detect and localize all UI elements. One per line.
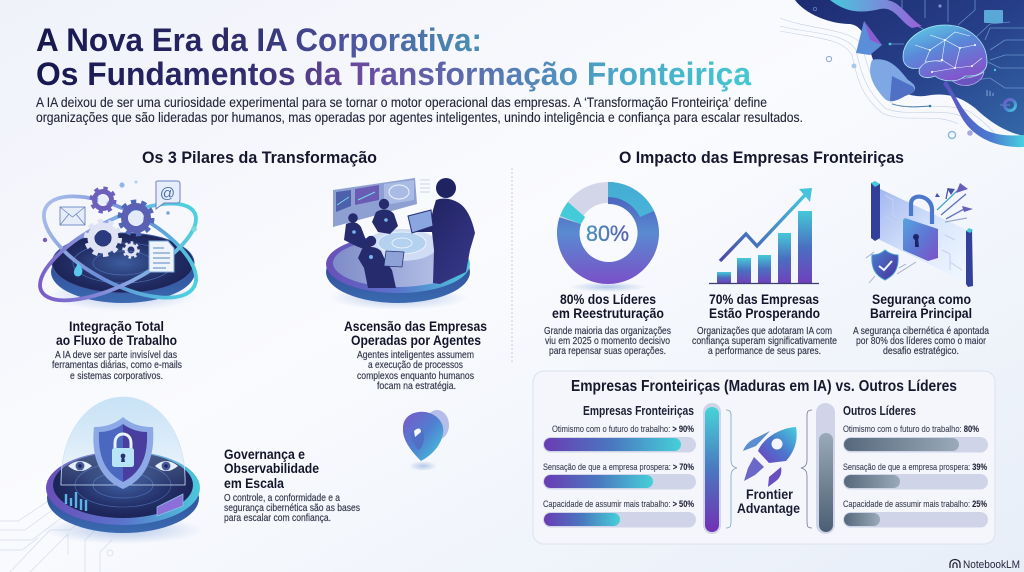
- arrows: [935, 183, 973, 222]
- heading: Observabilidade: [224, 461, 319, 476]
- heading: [344, 319, 487, 348]
- tablet: [408, 210, 433, 233]
- shield check: [872, 250, 898, 280]
- description: A segurança cibernética é apontada: [853, 326, 989, 337]
- panel: stat security: [853, 181, 989, 357]
- droplet: [74, 262, 82, 276]
- contour lines: [780, 18, 1000, 142]
- title: A Nova Era da IA Corporativa:: [36, 22, 482, 58]
- panel: pillar 3: [43, 397, 360, 544]
- gear right: [120, 202, 152, 234]
- bar: optimism 90: Otimismo com o futuro do trabalho: > 90%: [552, 424, 694, 434]
- Frontier Advantage label: Frontier: [746, 487, 794, 502]
- panel: pillar 2: [326, 178, 487, 392]
- heading: ao Fluxo de Trabalho: [56, 333, 177, 348]
- description: focam na estratégia.: [377, 381, 456, 392]
- mini chart: [157, 494, 183, 516]
- Frontier Advantage label: Advantage: [737, 501, 800, 516]
- donut chart: 80%: [586, 221, 629, 246]
- description: complexos enquanto humanos: [357, 371, 474, 382]
- orbit back: [29, 176, 211, 318]
- description: por 80% dos líderes como o maior: [856, 336, 987, 347]
- heading: [709, 292, 820, 321]
- mini bars: [66, 492, 86, 511]
- brain nodes: [929, 39, 976, 73]
- intro paragraph: [36, 95, 803, 125]
- subheading: Outros Líderes: [843, 404, 916, 418]
- mini bars: [987, 90, 993, 96]
- glass dome: [61, 397, 185, 485]
- heading: [552, 292, 664, 321]
- human manager: [413, 178, 475, 284]
- vertical bar: frontier: [703, 403, 721, 534]
- bracket right: [801, 410, 812, 528]
- bar: capacity 50: Capacidade de assumir mais trabalho: > 50%: [543, 499, 694, 509]
- description: A IA deve ser parte invisível das: [55, 350, 177, 361]
- bar: capacity 25: Capacidade de assumir mais trabalho: 25%: [843, 499, 987, 509]
- shield: [93, 417, 153, 489]
- heading: [56, 319, 177, 348]
- intro paragraph: A IA deixou de ser uma curiosidade experimental para se tornar o motor operacional das empresas. A ‘Transformação Fronteiriça’ define: [36, 95, 767, 110]
- heading: 80% dos Líderes: [560, 292, 656, 307]
- description: [544, 326, 671, 357]
- eye right: [155, 461, 178, 471]
- bar: prosper 39: Sensação de que a empresa prospera: 39%: [843, 462, 987, 472]
- brain cerebellum: [948, 72, 984, 86]
- agents: [344, 199, 398, 288]
- heading: em Reestruturação: [552, 306, 664, 321]
- wall posts: [871, 182, 880, 241]
- icon: rocket: [743, 427, 797, 487]
- heading: Segurança como: [872, 292, 971, 307]
- bracket left: [726, 410, 737, 528]
- panel: pillar 1: [27, 176, 211, 382]
- description: viu em 2025 o momento decisivo: [545, 336, 670, 347]
- description: ferramentas diárias, como e-mails: [52, 360, 182, 371]
- bar: capacity 25: [843, 499, 988, 528]
- header illustration: AI brain: [780, 0, 1024, 147]
- description: [853, 326, 989, 357]
- title: Os Fundamentos da Transformação Fronteiriça: [36, 56, 751, 92]
- top ribbon: [830, 0, 922, 28]
- chat @ icon: [156, 181, 180, 209]
- description: Agentes inteligentes assumem: [357, 350, 474, 361]
- bar chart with arrow: [709, 188, 819, 284]
- wall: [876, 187, 969, 284]
- bar: capacity 50: [543, 499, 696, 528]
- description: Organizações que adotaram IA com: [697, 326, 832, 337]
- icon: agents operated company: [326, 178, 475, 310]
- icon: governance dome: [43, 397, 203, 544]
- panel: comparison: [533, 371, 995, 544]
- description: segurança cibernética são as bases: [224, 503, 360, 514]
- icon: security wall: [866, 181, 973, 287]
- heading: 70% das Empresas: [709, 292, 819, 307]
- gear big: [87, 222, 119, 254]
- brain: [903, 25, 987, 81]
- lock: [903, 197, 938, 261]
- vertical bar: others: [816, 403, 835, 534]
- description: confiança superam significativamente: [692, 336, 837, 347]
- bar: prosper 70: [543, 462, 696, 490]
- description: para repensar suas operações.: [549, 346, 666, 357]
- description: para escalar com confiança.: [224, 513, 331, 524]
- eye left: [68, 461, 92, 471]
- bar: prosper 39: [843, 462, 988, 490]
- description: [692, 326, 837, 357]
- brain network: [915, 32, 982, 72]
- brain stem ribbon: [943, 80, 1024, 147]
- document icon: [149, 241, 174, 272]
- bar: optimism 80: [843, 424, 988, 452]
- donut chart: [557, 182, 659, 292]
- floating blob: [870, 59, 915, 101]
- floating prism: [856, 21, 882, 55]
- bar: optimism 90: [543, 424, 696, 452]
- Frontier Advantage label: [737, 487, 800, 516]
- bar: prosper 70: Sensação de que a empresa prospera: > 70%: [543, 462, 694, 472]
- description: O controle, a conformidade e a: [224, 493, 340, 504]
- comparison title: Empresas Fronteiriças (Maduras em IA) vs. Outros Líderes: [571, 378, 957, 395]
- title: [36, 22, 751, 92]
- heading: [224, 447, 319, 491]
- description: e sistemas corporativos.: [70, 371, 163, 382]
- gauge: [1004, 100, 1016, 110]
- icon: notebook: [950, 560, 960, 568]
- description: [52, 350, 182, 382]
- heading: pillars: Os 3 Pilares da Transformação: [142, 149, 377, 167]
- description: Grande maioria das organizações: [544, 326, 671, 337]
- screens: [333, 178, 430, 227]
- icon: floating 3D shape: [403, 410, 449, 471]
- NotebookLM logo: NotebookLM: [963, 559, 1020, 571]
- decorative circuit lines: bottom left: [0, 500, 113, 572]
- heading: Governança e: [224, 447, 305, 462]
- column: frontier companies: [543, 404, 696, 528]
- heading: impact: O Impacto das Empresas Fronteiriças: [619, 149, 904, 167]
- padlock: [112, 434, 134, 467]
- dots: [813, 4, 996, 139]
- description: [357, 350, 474, 392]
- heading: Ascensão das Empresas: [344, 319, 487, 334]
- bar: optimism 80: Otimismo com o futuro do trabalho: 80%: [843, 424, 979, 434]
- heading: Barreira Principal: [870, 306, 972, 321]
- heading: em Escala: [224, 476, 284, 491]
- circuit lines on wall: [885, 195, 962, 270]
- gear small: [124, 243, 138, 257]
- gear top: [92, 189, 114, 211]
- heading: Operadas por Agentes: [351, 333, 481, 348]
- intro paragraph: organizações que são lideradas por humanos, mas operadas por agentes inteligentes, unindo inteligência e confiança para escalar resultados.: [36, 110, 803, 125]
- table: [366, 229, 438, 261]
- heading: Integração Total: [69, 319, 164, 334]
- description: desafio estratégico.: [883, 346, 959, 357]
- description: a execução de processos: [368, 360, 463, 371]
- heading: Estão Prosperando: [709, 306, 820, 321]
- panel: stat 70% companies: [692, 188, 837, 357]
- subheading: Empresas Fronteiriças: [583, 404, 694, 418]
- panel: stat 80% leaders: [544, 182, 671, 357]
- circuit traces: [890, 0, 1024, 105]
- description: [224, 493, 360, 524]
- particles: [43, 180, 197, 242]
- dashboard chip: [984, 10, 1003, 23]
- laptop: [384, 251, 404, 267]
- heading: [870, 292, 972, 321]
- agent glow: [352, 218, 388, 259]
- envelope icon: [60, 207, 85, 225]
- orbit front: [27, 184, 209, 320]
- icon: workflow disc: [27, 176, 211, 320]
- description: a performance de seus pares.: [708, 346, 821, 357]
- column: other leaders: [843, 404, 988, 528]
- dark wave background: [795, 0, 1024, 136]
- chat @ icon: @: [160, 185, 175, 202]
